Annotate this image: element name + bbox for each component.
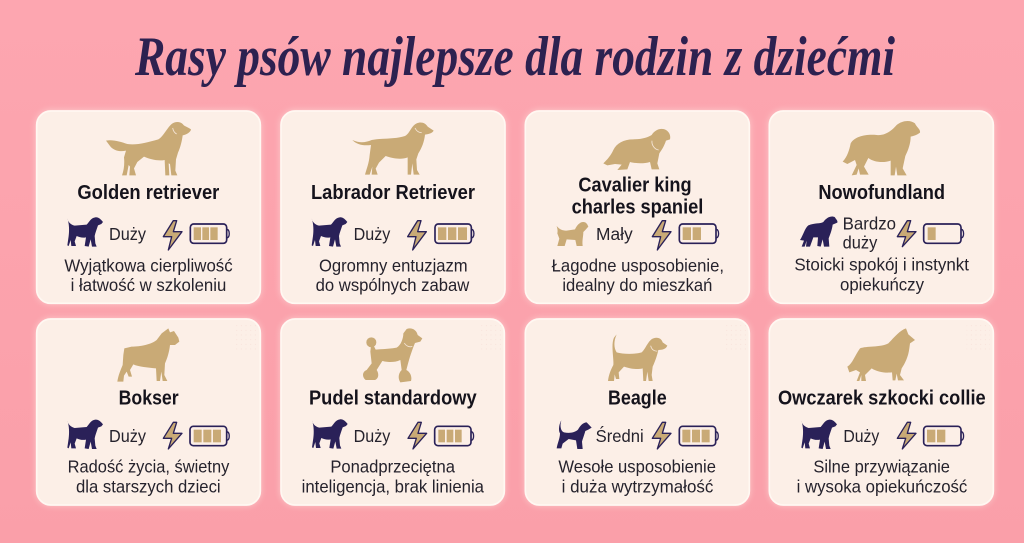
size label: duży: [843, 232, 877, 252]
icon: collie silhouette: [847, 328, 915, 381]
description: Silne przywiązanie: [813, 457, 950, 477]
panel: Owczarek szkocki collie: [769, 319, 993, 505]
heading: charles spaniel: [572, 195, 703, 218]
panel: Labrador Retriever: [281, 111, 505, 303]
icon: size dog: [312, 217, 347, 247]
description: Radość życia, świetny: [68, 457, 229, 477]
icon: labrador silhouette: [352, 123, 434, 175]
icon: energy bolt: [652, 221, 671, 250]
heading: [572, 174, 703, 218]
description: i łatwość w szkoleniu: [71, 275, 226, 295]
description: Ponadprzeciętna: [330, 457, 455, 477]
description: inteligencja, brak linienia: [302, 477, 484, 497]
description: Wyjątkowa cierpliwość: [64, 256, 233, 276]
panel: Golden retriever: [37, 111, 260, 303]
icon: energy bolt: [163, 221, 182, 250]
icon: energy bolt: [652, 422, 671, 449]
panel: Nowofundland: [769, 111, 993, 303]
size label: Duży: [843, 426, 879, 446]
description: i duża wytrzymałość: [562, 477, 713, 497]
description: Stoicki spokój i instynkt: [794, 255, 969, 275]
description: [552, 256, 724, 295]
icon: energy battery: [435, 224, 474, 243]
description: [64, 256, 233, 295]
description: [558, 457, 716, 497]
icon: boxer silhouette: [117, 328, 179, 382]
icon: beagle silhouette: [608, 334, 667, 381]
description: Wesołe usposobienie: [558, 457, 716, 477]
icon: energy bolt: [897, 221, 916, 247]
icon: size dog: [312, 419, 348, 449]
size label: Duży: [109, 426, 146, 446]
size label: Duży: [109, 224, 146, 244]
description: [316, 256, 470, 295]
heading: Beagle: [608, 386, 667, 409]
icon: size dog medium: [557, 420, 592, 449]
size label: Duży: [354, 426, 390, 446]
icon: energy battery: [924, 426, 964, 446]
size label: Duży: [354, 224, 390, 244]
description: i wysoka opiekuńczość: [797, 477, 967, 497]
description: [794, 255, 969, 295]
description: [797, 457, 967, 497]
icon: energy battery: [190, 426, 229, 446]
description: [68, 457, 229, 497]
size label: Średni: [596, 425, 644, 446]
icon: size dog small: [557, 222, 588, 246]
panel: Pudel standardowy: [281, 319, 504, 505]
icon: size dog: [67, 217, 103, 247]
size label: Mały: [596, 224, 633, 244]
panel: Cavalier king charles spaniel: [525, 111, 749, 303]
size label: Bardzo: [843, 213, 896, 233]
icon: energy battery: [924, 224, 964, 243]
icon: newfoundland silhouette: [843, 121, 920, 175]
heading: Bokser: [119, 386, 179, 409]
description: opiekuńczy: [840, 275, 924, 295]
icon: energy battery: [679, 224, 719, 243]
icon: energy battery: [190, 224, 229, 243]
icon: energy bolt: [163, 422, 182, 449]
icon: size dog very large: [800, 217, 837, 247]
description: Łagodne usposobienie,: [552, 256, 724, 276]
icon: golden retriever silhouette: [106, 122, 191, 175]
heading: Labrador Retriever: [311, 181, 475, 204]
heading: Nowofundland: [818, 181, 945, 204]
icon: size dog: [801, 420, 837, 449]
heading: Golden retriever: [77, 181, 219, 204]
icon: energy bolt: [897, 422, 916, 449]
description: do wspólnych zabaw: [316, 275, 470, 295]
description: idealny do mieszkań: [562, 275, 712, 295]
icon: energy bolt: [408, 221, 426, 250]
icon: size dog: [67, 420, 103, 449]
heading: Pudel standardowy: [309, 386, 477, 409]
panel: Bokser: [37, 319, 260, 505]
description: dla starszych dzieci: [76, 477, 221, 497]
icon: poodle silhouette: [363, 328, 422, 382]
panel: Beagle: [525, 319, 749, 505]
heading: Cavalier king: [578, 174, 692, 197]
description: Ogromny entuzjazm: [319, 256, 468, 276]
icon: energy bolt: [408, 422, 427, 449]
icon: energy battery: [435, 426, 474, 446]
description: [302, 457, 484, 497]
icon: energy battery: [679, 426, 718, 446]
icon: cavalier silhouette: [603, 129, 670, 170]
heading: Owczarek szkocki collie: [778, 386, 986, 409]
size label: [843, 213, 896, 252]
